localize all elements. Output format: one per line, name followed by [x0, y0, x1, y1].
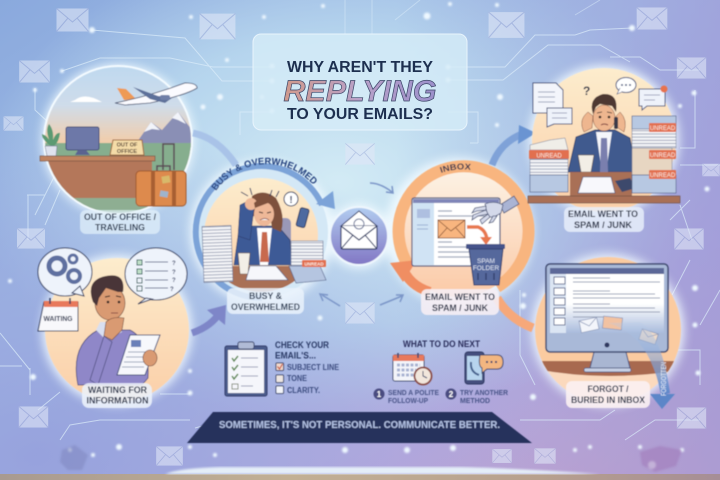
icon: orange envelope	[438, 220, 465, 238]
checklist section: TONE	[287, 374, 308, 383]
step 1: 1	[377, 390, 382, 399]
paper stack with unread tags, right	[632, 116, 676, 193]
stress marks	[241, 188, 279, 197]
banner	[187, 412, 532, 443]
title line 3: TO YOUR EMAILS?	[287, 106, 433, 123]
panel: inbox	[390, 160, 536, 332]
scene	[44, 67, 192, 214]
bubble: gears	[38, 248, 92, 296]
label: email went to spam, inbox: EMAIL WENT TO	[425, 292, 495, 303]
icon: spam folder bin: SPAM	[477, 258, 495, 265]
paper stack right	[289, 241, 326, 283]
label: busy and overwhelmed	[227, 288, 304, 314]
icon: clipboard	[225, 342, 267, 396]
panel: out of office	[40, 60, 200, 214]
label: email went to spam, top	[564, 207, 644, 232]
documents	[246, 266, 288, 280]
label: out of office: TRAVELING	[95, 222, 145, 234]
ring	[196, 166, 328, 298]
step 1: FOLLOW-UP	[388, 396, 428, 405]
icon: speech bubble	[616, 78, 636, 94]
icon: airplane	[115, 83, 197, 105]
paper stack with unread tag, left	[529, 138, 569, 192]
checklist section: CLARITY.	[287, 386, 320, 395]
falling envelopes	[579, 316, 658, 345]
label: waiting for information: WAITING FOR	[88, 385, 147, 396]
icon: waiting calendar: WAITING	[44, 314, 73, 323]
arrow: forgotten	[608, 322, 675, 409]
panel: forgot, buried in inbox	[530, 257, 690, 411]
label: busy and overwhelmed: OVERWHELMED	[231, 302, 300, 313]
checklist section	[225, 340, 340, 396]
out of office sign: OFFICE	[117, 149, 137, 155]
icon: spam folder bin: FOLDER	[473, 265, 499, 272]
man	[568, 94, 636, 172]
checklist items	[276, 363, 284, 370]
icon: monitor	[546, 264, 668, 372]
icon: suitcase	[136, 144, 186, 206]
small arrows	[320, 183, 403, 306]
icon: robot hand	[472, 196, 519, 224]
paper stack left	[202, 225, 233, 282]
orange return arrow	[402, 266, 430, 292]
orange tail	[497, 298, 533, 328]
hexagon clusters	[60, 445, 682, 472]
label: email went to spam, inbox: SPAM / JUNK	[432, 303, 488, 314]
step 2: 2	[449, 390, 454, 399]
icon: spam folder bin	[466, 244, 505, 285]
icon: message alert	[639, 86, 668, 110]
label: email went to spam, top: SPAM / JUNK	[574, 220, 632, 231]
step 2: TRY ANOTHER	[460, 388, 509, 397]
icon: alert bubble: !	[289, 195, 293, 206]
label: forgot: FORGOT /	[588, 384, 629, 395]
label: busy and overwhelmed: BUSY &	[249, 291, 282, 302]
checklist heading: CHECK YOUR	[275, 340, 329, 351]
scene	[228, 192, 296, 292]
label: waiting for information: INFORMATION	[86, 396, 149, 406]
ring caption: INBOX	[439, 162, 472, 174]
checklist section: EMAIL'S...	[275, 350, 316, 362]
step 2: METHOD	[460, 396, 491, 405]
out of office sign	[110, 140, 144, 155]
ring caption: BUSY & OVERWHELMED	[210, 156, 318, 191]
arrow: to busy	[320, 294, 340, 306]
label: forgot	[566, 381, 650, 408]
paper stack right: UNREAD	[304, 262, 324, 266]
icon: central email	[330, 207, 388, 265]
icon: phone	[296, 207, 309, 228]
question marks: ?	[583, 84, 590, 98]
white glows behind circles	[42, 64, 684, 406]
label: out of office	[80, 210, 160, 234]
icon: plant	[42, 124, 60, 156]
desk with papers	[528, 172, 680, 203]
paper stack with unread tags, right: UNREAD	[650, 126, 676, 132]
label: email went to spam, top: EMAIL WENT TO	[568, 209, 638, 220]
icon: waiting calendar	[38, 298, 78, 331]
arrow: to inbox	[370, 183, 393, 193]
arrow: from spam	[380, 295, 403, 305]
bubble: checklist	[125, 248, 187, 304]
title panel	[253, 34, 467, 130]
title highlight: REPLYING	[284, 75, 436, 108]
paper stack with unread tags, right: UNREAD	[650, 153, 676, 159]
bubble: checklist: ?	[172, 270, 176, 276]
title line 1: WHY AREN'T THEY	[287, 59, 434, 76]
panel: waiting for information	[38, 248, 189, 402]
arrow: forgotten: FORGOTTEN	[661, 362, 668, 396]
label: email went to spam, inbox	[421, 289, 499, 315]
arrow: to spam folder	[467, 227, 487, 240]
paper stack with unread tag, left: UNREAD	[536, 154, 562, 160]
label: forgot: BURIED IN INBOX	[571, 395, 646, 406]
woman	[234, 226, 292, 265]
arrow: waiting to busy	[192, 305, 226, 333]
icon: document notes	[533, 83, 572, 127]
paper stack with unread tags, right: UNREAD	[650, 173, 676, 179]
out of office sign: OUT OF	[117, 142, 138, 148]
icon: document	[117, 335, 160, 375]
what to do next section	[374, 339, 509, 405]
panel: busy and overwhelmed	[192, 156, 336, 301]
bubble: checklist: ?	[172, 278, 176, 284]
icon: phone and chat	[465, 352, 503, 384]
man	[76, 275, 148, 385]
arrow: inbox to overloaded	[492, 125, 536, 165]
browser window	[412, 198, 500, 266]
arrow: out of office to busy	[193, 133, 236, 165]
banner text: SOMETIMES, IT'S NOT PERSONAL. COMMUNICATE BETTER.	[219, 419, 500, 431]
icon: alert bubble	[284, 192, 298, 206]
desk	[39, 154, 156, 199]
step 1: SEND A POLITE	[388, 388, 439, 397]
icon: calendar and clock	[393, 353, 432, 384]
checklist section: SUBJECT LINE	[287, 363, 340, 372]
bottom strip	[0, 474, 720, 480]
bottom glow band	[165, 467, 600, 474]
ring arrowhead	[316, 191, 335, 209]
heading: WHAT TO DO NEXT	[403, 339, 480, 350]
bubble: checklist: ?	[172, 261, 176, 267]
panel: email went to spam, overloaded man	[528, 68, 680, 212]
step 1	[374, 388, 439, 405]
label: out of office: OUT OF OFFICE /	[84, 212, 156, 223]
bubble: checklist: ?	[170, 287, 174, 293]
step 2	[446, 388, 509, 405]
coffee cup	[238, 253, 250, 274]
ring	[394, 167, 524, 297]
icon: computer monitor	[66, 127, 99, 155]
label: waiting for information	[82, 383, 152, 408]
